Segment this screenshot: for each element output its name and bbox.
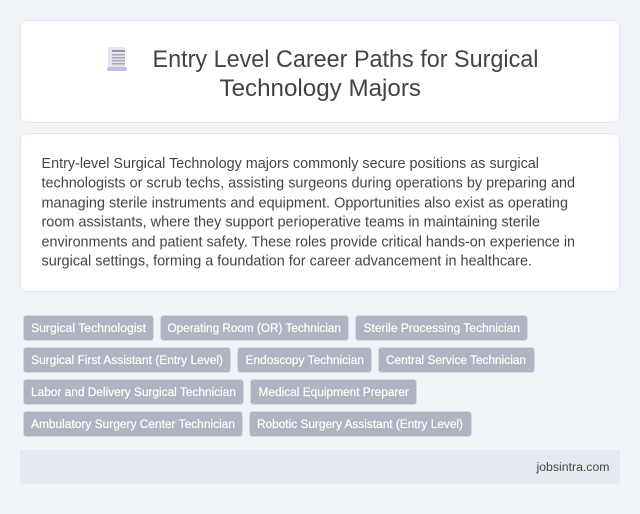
- tag: Labor and Delivery Surgical Technician: [24, 380, 244, 404]
- tag: Labor and Delivery Surgical Technician: Labor and Delivery Surgical Technician: [31, 385, 236, 399]
- tag: Ambulatory Surgery Center Technician: [24, 412, 242, 436]
- tag: Surgical Technologist: [24, 316, 154, 340]
- description text: surgical settings, forming a foundation for career advancement in healthcare.: [42, 254, 532, 270]
- footer bar: [20, 450, 620, 484]
- title: [152, 46, 538, 102]
- tag: Central Service Technician: [378, 348, 534, 372]
- title: Entry Level Career Paths for Surgical: [152, 46, 538, 73]
- tag: Operating Room (OR) Technician: [160, 316, 348, 340]
- description text: [42, 156, 575, 270]
- icon: document: [107, 47, 127, 71]
- tag: Medical Equipment Preparer: [250, 380, 416, 404]
- tag: Central Service Technician: Central Service Technician: [386, 353, 526, 367]
- description text: managing sterile instruments and equipment. Opportunities also exist as operating: [42, 196, 568, 212]
- tag: Sterile Processing Technician: [356, 316, 528, 340]
- panel: description: [20, 134, 620, 292]
- footer source text: jobsintra.com: [536, 460, 610, 474]
- tag: Ambulatory Surgery Center Technician: Ambulatory Surgery Center Technician: [31, 417, 235, 431]
- tag: Robotic Surgery Assistant (Entry Level): [250, 412, 472, 436]
- description text: technologists or scrub techs, assisting surgeons during operations by preparing and: [42, 176, 575, 192]
- tag: Surgical First Assistant (Entry Level): [24, 348, 230, 372]
- panel: title card: [20, 20, 620, 122]
- description text: Entry-level Surgical Technology majors commonly secure positions as surgical: [42, 156, 539, 172]
- tag: Surgical First Assistant (Entry Level): Surgical First Assistant (Entry Level): [31, 353, 223, 367]
- tag: Surgical Technologist: Surgical Technologist: [31, 321, 147, 335]
- description text: environments and patient safety. These roles provide critical hands-on experience in: [42, 234, 575, 250]
- tag: Endoscopy Technician: [238, 348, 372, 372]
- tag: Sterile Processing Technician: Sterile Processing Technician: [364, 321, 520, 335]
- tag: Operating Room (OR) Technician: Operating Room (OR) Technician: [168, 321, 341, 335]
- tag: Endoscopy Technician: Endoscopy Technician: [246, 353, 364, 367]
- tag: Medical Equipment Preparer: Medical Equipment Preparer: [258, 385, 409, 399]
- tag: Robotic Surgery Assistant (Entry Level): Robotic Surgery Assistant (Entry Level): [257, 417, 463, 431]
- description text: room assistants, where they support perioperative teams in maintaining sterile: [42, 214, 540, 230]
- title: Technology Majors: [220, 75, 421, 102]
